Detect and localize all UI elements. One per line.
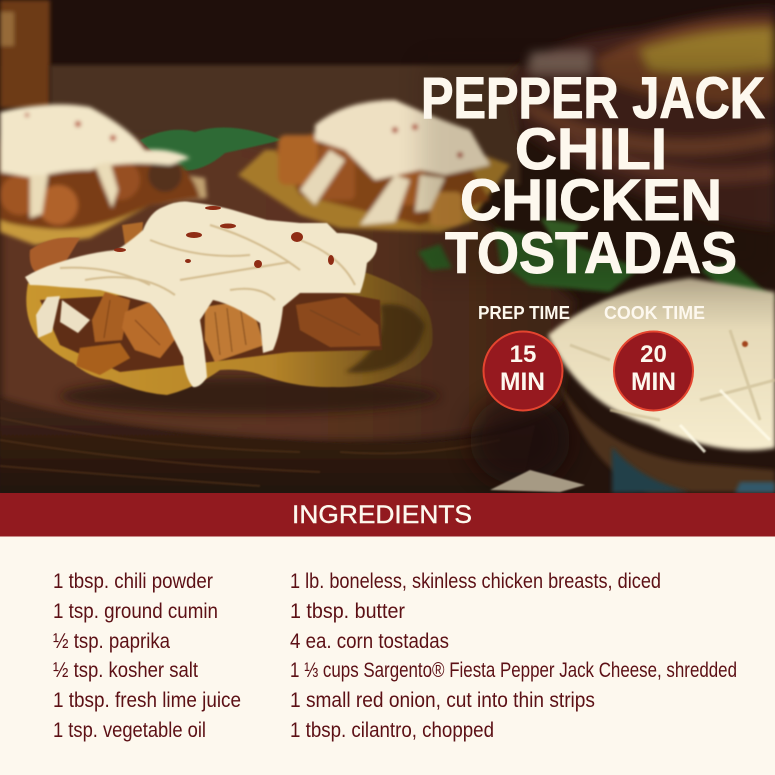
board front edge xyxy=(0,400,535,493)
ingredients list: main items: 4 ea. corn tostadas xyxy=(290,630,449,653)
title: CHILI xyxy=(515,117,667,182)
bowl of shredded cheese xyxy=(548,278,775,492)
dark wall xyxy=(0,0,775,66)
shadow at right of board xyxy=(470,395,570,485)
back table surface xyxy=(50,65,520,185)
cook time badge: MIN xyxy=(631,368,676,396)
glass jar at top left xyxy=(0,0,50,108)
blue cloth and stray shreds xyxy=(612,447,690,493)
ingredients list: spices: 1 tbsp. chili powder xyxy=(53,570,213,593)
prep time label: PREP TIME xyxy=(478,303,570,323)
prep time badge xyxy=(484,332,562,410)
cheese strands and shading xyxy=(60,225,355,300)
stacked clay plates xyxy=(510,8,775,228)
ingredients list: main items: 1 tbsp. cilantro, chopped xyxy=(290,719,494,742)
prep time badge: MIN xyxy=(500,368,545,396)
ingredients list: main items: 1 lb. boneless, skinless chicken breasts, diced xyxy=(290,570,661,593)
shadow under main tostada xyxy=(60,378,440,414)
back right tostada xyxy=(238,100,510,232)
ingredients list: spices: ½ tsp. paprika xyxy=(53,630,170,653)
ingredients header band: INGREDIENTS xyxy=(292,501,472,529)
ingredients list: main items xyxy=(290,570,737,742)
cook time block xyxy=(604,303,705,410)
board grain xyxy=(0,418,500,486)
cook time badge xyxy=(614,332,693,410)
darkening overlay behind title xyxy=(420,60,775,280)
ingredients list: spices: ½ tsp. kosher salt xyxy=(53,659,198,682)
wooden cutting board xyxy=(0,140,575,442)
ingredients list: spices: 1 tsp. vegetable oil xyxy=(53,719,206,742)
back left tostada xyxy=(0,104,207,245)
cilantro sprigs behind title xyxy=(418,218,775,305)
ingredients list: main items: 1 tbsp. butter xyxy=(290,600,405,623)
title: TOSTADAS xyxy=(445,221,737,286)
back left cilantro xyxy=(140,128,282,171)
ingredients list: spices: 1 tsp. ground cumin xyxy=(53,600,218,623)
melted cheese xyxy=(25,202,377,387)
ingredients list: spices xyxy=(53,570,241,742)
ingredients list: main items: 1 small red onion, cut into thin strips xyxy=(290,689,595,712)
prep time block xyxy=(478,303,570,410)
ingredients panel background xyxy=(0,536,775,775)
chili flakes xyxy=(114,206,334,268)
ingredients header band xyxy=(0,493,775,536)
cook time label: COOK TIME xyxy=(604,303,705,323)
ingredients list: spices: 1 tbsp. fresh lime juice xyxy=(53,689,241,712)
title xyxy=(421,66,765,286)
main tostada shell xyxy=(25,202,432,395)
chicken pieces xyxy=(30,222,382,375)
title: CHICKEN xyxy=(460,168,722,233)
cook time badge: 20 xyxy=(640,341,667,368)
food photo background xyxy=(0,0,775,493)
prep time badge: 15 xyxy=(510,341,536,368)
